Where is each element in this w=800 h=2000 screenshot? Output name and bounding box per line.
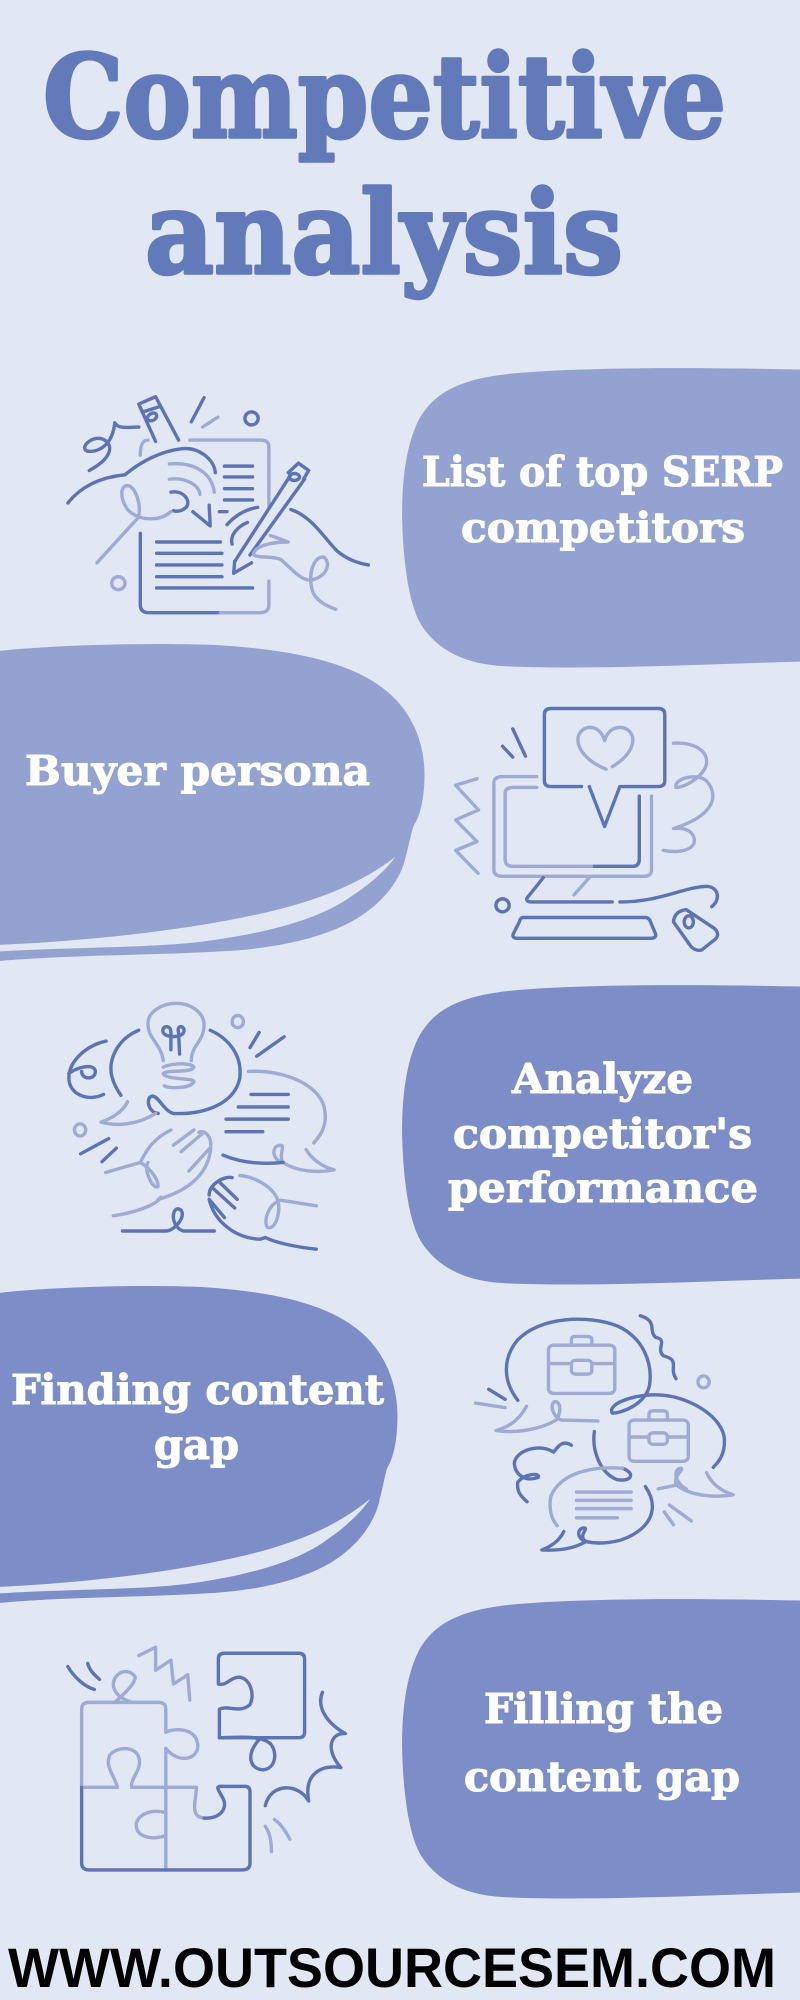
icon: document and writing hands — [68, 397, 368, 613]
panel: analyze competitor's performance: competitor's — [453, 1110, 752, 1158]
footer url: WWW.OUTSOURCESEM.COM — [8, 1936, 776, 1999]
panel: analyze competitor's performance: performance — [448, 1164, 758, 1212]
panel: finding content gap: gap — [154, 1421, 239, 1469]
panel: list of top SERP competitors: List of top SERP — [422, 448, 783, 496]
icon: light bulb, speech bubbles and hands — [69, 1003, 334, 1249]
panel: filling the content gap — [402, 1599, 800, 1898]
icon: computer with heart bubble — [456, 709, 718, 950]
panel: analyze competitor's performance: Analyze — [511, 1055, 693, 1103]
panel: analyze competitor's performance — [402, 985, 800, 1284]
panel: filling the content gap: Filling the — [484, 1685, 723, 1733]
panel: list of top SERP competitors: competitors — [461, 504, 745, 552]
icon: puzzle pieces — [68, 1647, 345, 1870]
panel: filling the content gap: content gap — [464, 1753, 740, 1801]
panel: finding content gap: Finding content — [11, 1366, 384, 1414]
panel: buyer persona: Buyer persona — [25, 747, 370, 795]
icon: speech bubbles with briefcases — [476, 1316, 733, 1550]
title: analysis — [145, 166, 623, 300]
title: Competitive — [43, 30, 726, 164]
panel: finding content gap — [0, 1286, 397, 1603]
title — [43, 30, 726, 300]
panel: buyer persona — [0, 644, 424, 961]
panel: list of top SERP competitors — [402, 368, 800, 667]
